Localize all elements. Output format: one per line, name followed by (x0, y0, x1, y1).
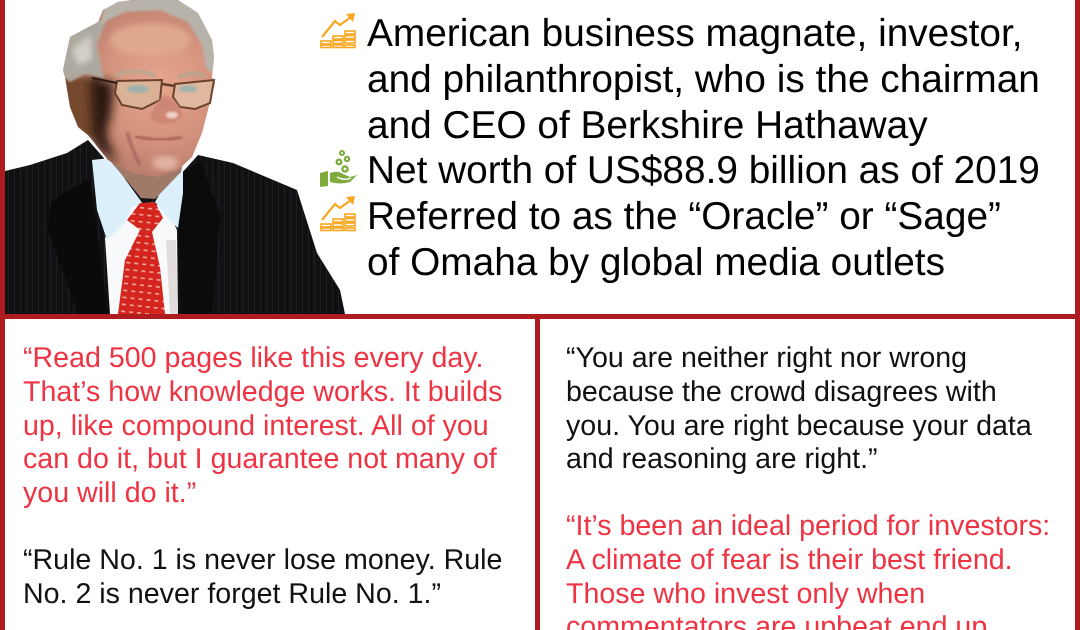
text: role description: American business magnate, investor, (367, 12, 1023, 55)
left lapel (47, 178, 108, 314)
nose (150, 95, 183, 124)
right collar (155, 155, 183, 228)
quote: read 500 pages: you will do it.” (23, 477, 196, 509)
quote: right nor wrong (566, 342, 1032, 475)
portrait of Warren Buffett (5, 0, 345, 314)
text: role description: and philanthropist, who is the chairman (367, 58, 1040, 101)
text: role description: and CEO of Berkshire Hathaway (367, 104, 928, 147)
text: nickname: of Omaha by global media outlets (367, 241, 945, 284)
hair top (100, 0, 216, 75)
suit jacket (5, 140, 345, 314)
neck (105, 150, 185, 199)
left shadow (90, 78, 118, 165)
text: net worth: Net worth of US$88.9 billion as of 2019 (367, 149, 1040, 192)
head (60, 0, 220, 180)
quote: read 500 pages (23, 342, 502, 509)
shirt body (105, 205, 178, 314)
icon: rising chart with coins (320, 13, 356, 48)
frame: left border (0, 0, 5, 630)
cheek crease (127, 132, 140, 165)
quote: ideal period: A climate of fear is their best friend. (566, 544, 1013, 576)
quote: ideal period (566, 510, 1050, 630)
quote: ideal period: “It’s been an ideal period for investors: (566, 510, 1050, 542)
text: nickname: Referred to as the “Oracle” or “Sage” (367, 195, 1001, 238)
quote: read 500 pages: can do it, but I guarantee not many of (23, 443, 497, 475)
mouth (135, 136, 182, 140)
forehead highlight (110, 24, 190, 56)
quote: right nor wrong: and reasoning are right.” (566, 443, 878, 475)
text: nickname (367, 195, 1001, 284)
ear and side shading (60, 75, 100, 140)
shirt fold shading (166, 240, 178, 314)
frame: right border (1075, 0, 1080, 630)
eyes (127, 85, 149, 93)
glasses (92, 78, 214, 109)
quote: rule no. 1: “Rule No. 1 is never lose money. Rule (23, 544, 502, 576)
quote: right nor wrong: because the crowd disagrees with (566, 376, 997, 408)
chin highlight (152, 156, 178, 170)
left collar (92, 158, 143, 240)
quote: rule no. 1: No. 2 is never forget Rule No. 1.” (23, 578, 441, 610)
quote: read 500 pages: “Read 500 pages like this every day. (23, 342, 483, 374)
eyebrows (116, 71, 205, 78)
right lapel (178, 160, 220, 314)
quote: right nor wrong: you. You are right because your data (566, 410, 1032, 442)
icon: rising chart with coins (320, 196, 356, 232)
icon: hand with coins (320, 150, 357, 187)
frame: horizontal divider (0, 314, 1080, 319)
quote: right nor wrong: “You are neither right nor wrong (566, 342, 967, 374)
tie (118, 202, 165, 314)
text: role description (367, 12, 1040, 147)
quote: ideal period: Those who invest only when (566, 578, 925, 610)
hair left (60, 20, 106, 82)
quote: read 500 pages: That’s how knowledge works. It builds (23, 376, 502, 408)
quote: rule no. 1 (23, 544, 502, 610)
quote: read 500 pages: up, like compound interest. All of you (23, 410, 489, 442)
frame: vertical divider (535, 319, 540, 630)
